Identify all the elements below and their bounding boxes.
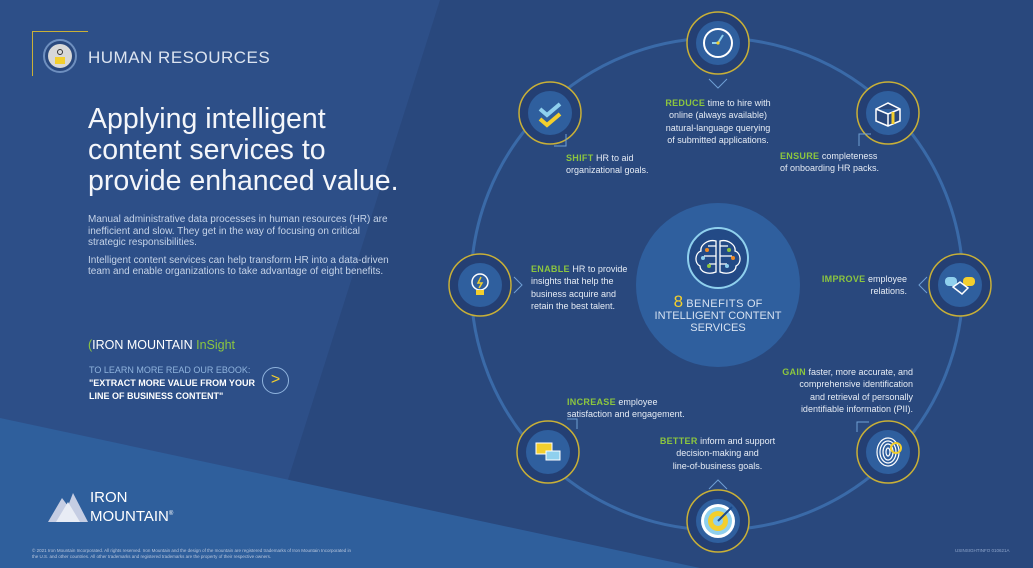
node: enable bulb (449, 254, 511, 316)
node: shift checks (519, 82, 581, 144)
text: reduce (665, 98, 771, 145)
text: shift: organizational goals. (566, 165, 649, 175)
intro text: Intelligent content services can help transform HR into a data-driven (88, 255, 389, 266)
text: ensure: of onboarding HR packs. (780, 163, 879, 173)
text: increase (567, 397, 685, 419)
intro text (88, 214, 389, 277)
text: ensure (780, 151, 879, 173)
ebook callout: LINE OF BUSINESS CONTENT" (89, 391, 223, 401)
insight logo: (IRON MOUNTAIN InSight (88, 338, 235, 352)
center label: SERVICES (690, 322, 746, 334)
iron mountain logo: MOUNTAIN® (90, 508, 173, 525)
arrow button (262, 367, 289, 394)
iron mountain logo: IRON (90, 489, 128, 506)
text: shift (566, 153, 649, 175)
text: improve: relations. (870, 286, 907, 296)
text: enable (531, 264, 627, 311)
text: improve: IMPROVE employee (822, 274, 907, 284)
node: ensure box (857, 82, 919, 144)
intro text: strategic responsibilities. (88, 237, 197, 248)
center label: INTELLIGENT CONTENT (655, 310, 781, 322)
text: reduce: of submitted applications. (667, 135, 769, 145)
intro text: Manual administrative data processes in human resources (HR) are (88, 214, 388, 225)
center label (655, 292, 782, 334)
text: gain: identifiable information (PII). (801, 404, 913, 414)
text: shift: SHIFT HR to aid (566, 153, 634, 163)
text: gain (782, 367, 913, 414)
ebook callout (89, 365, 255, 401)
ebook callout: "EXTRACT MORE VALUE FROM YOUR (89, 378, 255, 388)
title (88, 103, 399, 197)
iron mountain logo (48, 489, 174, 525)
intro text: team and enable organizations to take advantage of eight benefits. (88, 266, 383, 277)
title: content services to (88, 134, 326, 166)
node: gain fingerprint (857, 421, 919, 483)
text: gain: comprehensive identification (799, 379, 913, 389)
icon: people (43, 39, 77, 73)
text: enable: insights that help the (531, 276, 614, 286)
center disk (636, 203, 800, 367)
header: human resources: HUMAN RESOURCES (88, 48, 270, 67)
text: enable: retain the best talent. (531, 301, 615, 311)
node: improve handshake (929, 254, 991, 316)
footer legal: © 2021 Iron Mountain Incorporated. All rights reserved. Iron Mountain and the design of the mountain are registered trademarks of Iron Mountain Incorporated in the U.S. and other countries. All other trademarks and registered trademarks are the property of their respective owners. (32, 548, 351, 558)
text: gain: and retrieval of personally (810, 392, 913, 402)
node: better target (687, 490, 749, 552)
node: reduce clock (687, 12, 749, 74)
text: reduce: online (always available) (669, 110, 767, 120)
header: human resources (32, 31, 270, 76)
text: reduce: natural-language querying (666, 123, 770, 133)
arrow button: > (271, 371, 280, 388)
pointers (514, 79, 927, 489)
text: enable: ENABLE HR to provide (531, 264, 627, 274)
title: provide enhanced value. (88, 165, 399, 197)
text: better: BETTER inform and support (660, 436, 775, 446)
text: increase: satisfaction and engagement. (567, 409, 685, 419)
title: Applying intelligent (88, 103, 326, 135)
text: better: line-of-business goals. (673, 461, 762, 471)
text: enable: business acquire and (531, 289, 616, 299)
text: improve (822, 274, 907, 296)
text: better: decision-making and (676, 448, 759, 458)
ebook callout: TO LEARN MORE READ OUR EBOOK: (89, 365, 250, 375)
center label: 8 BENEFITS OF (674, 292, 762, 311)
node: increase chat (517, 421, 579, 483)
text: reduce: REDUCE time to hire with (665, 98, 771, 108)
text: gain: GAIN faster, more accurate, and (782, 367, 913, 377)
text: better (660, 436, 776, 471)
ring (471, 38, 963, 530)
intro text: inefficient and slow. They get in the way of focusing on critical (88, 226, 360, 237)
text: increase: INCREASE employee (567, 397, 657, 407)
text: USINSIGHTINFO 010621A (955, 548, 1010, 553)
text: ensure: ENSURE completeness (780, 151, 877, 161)
